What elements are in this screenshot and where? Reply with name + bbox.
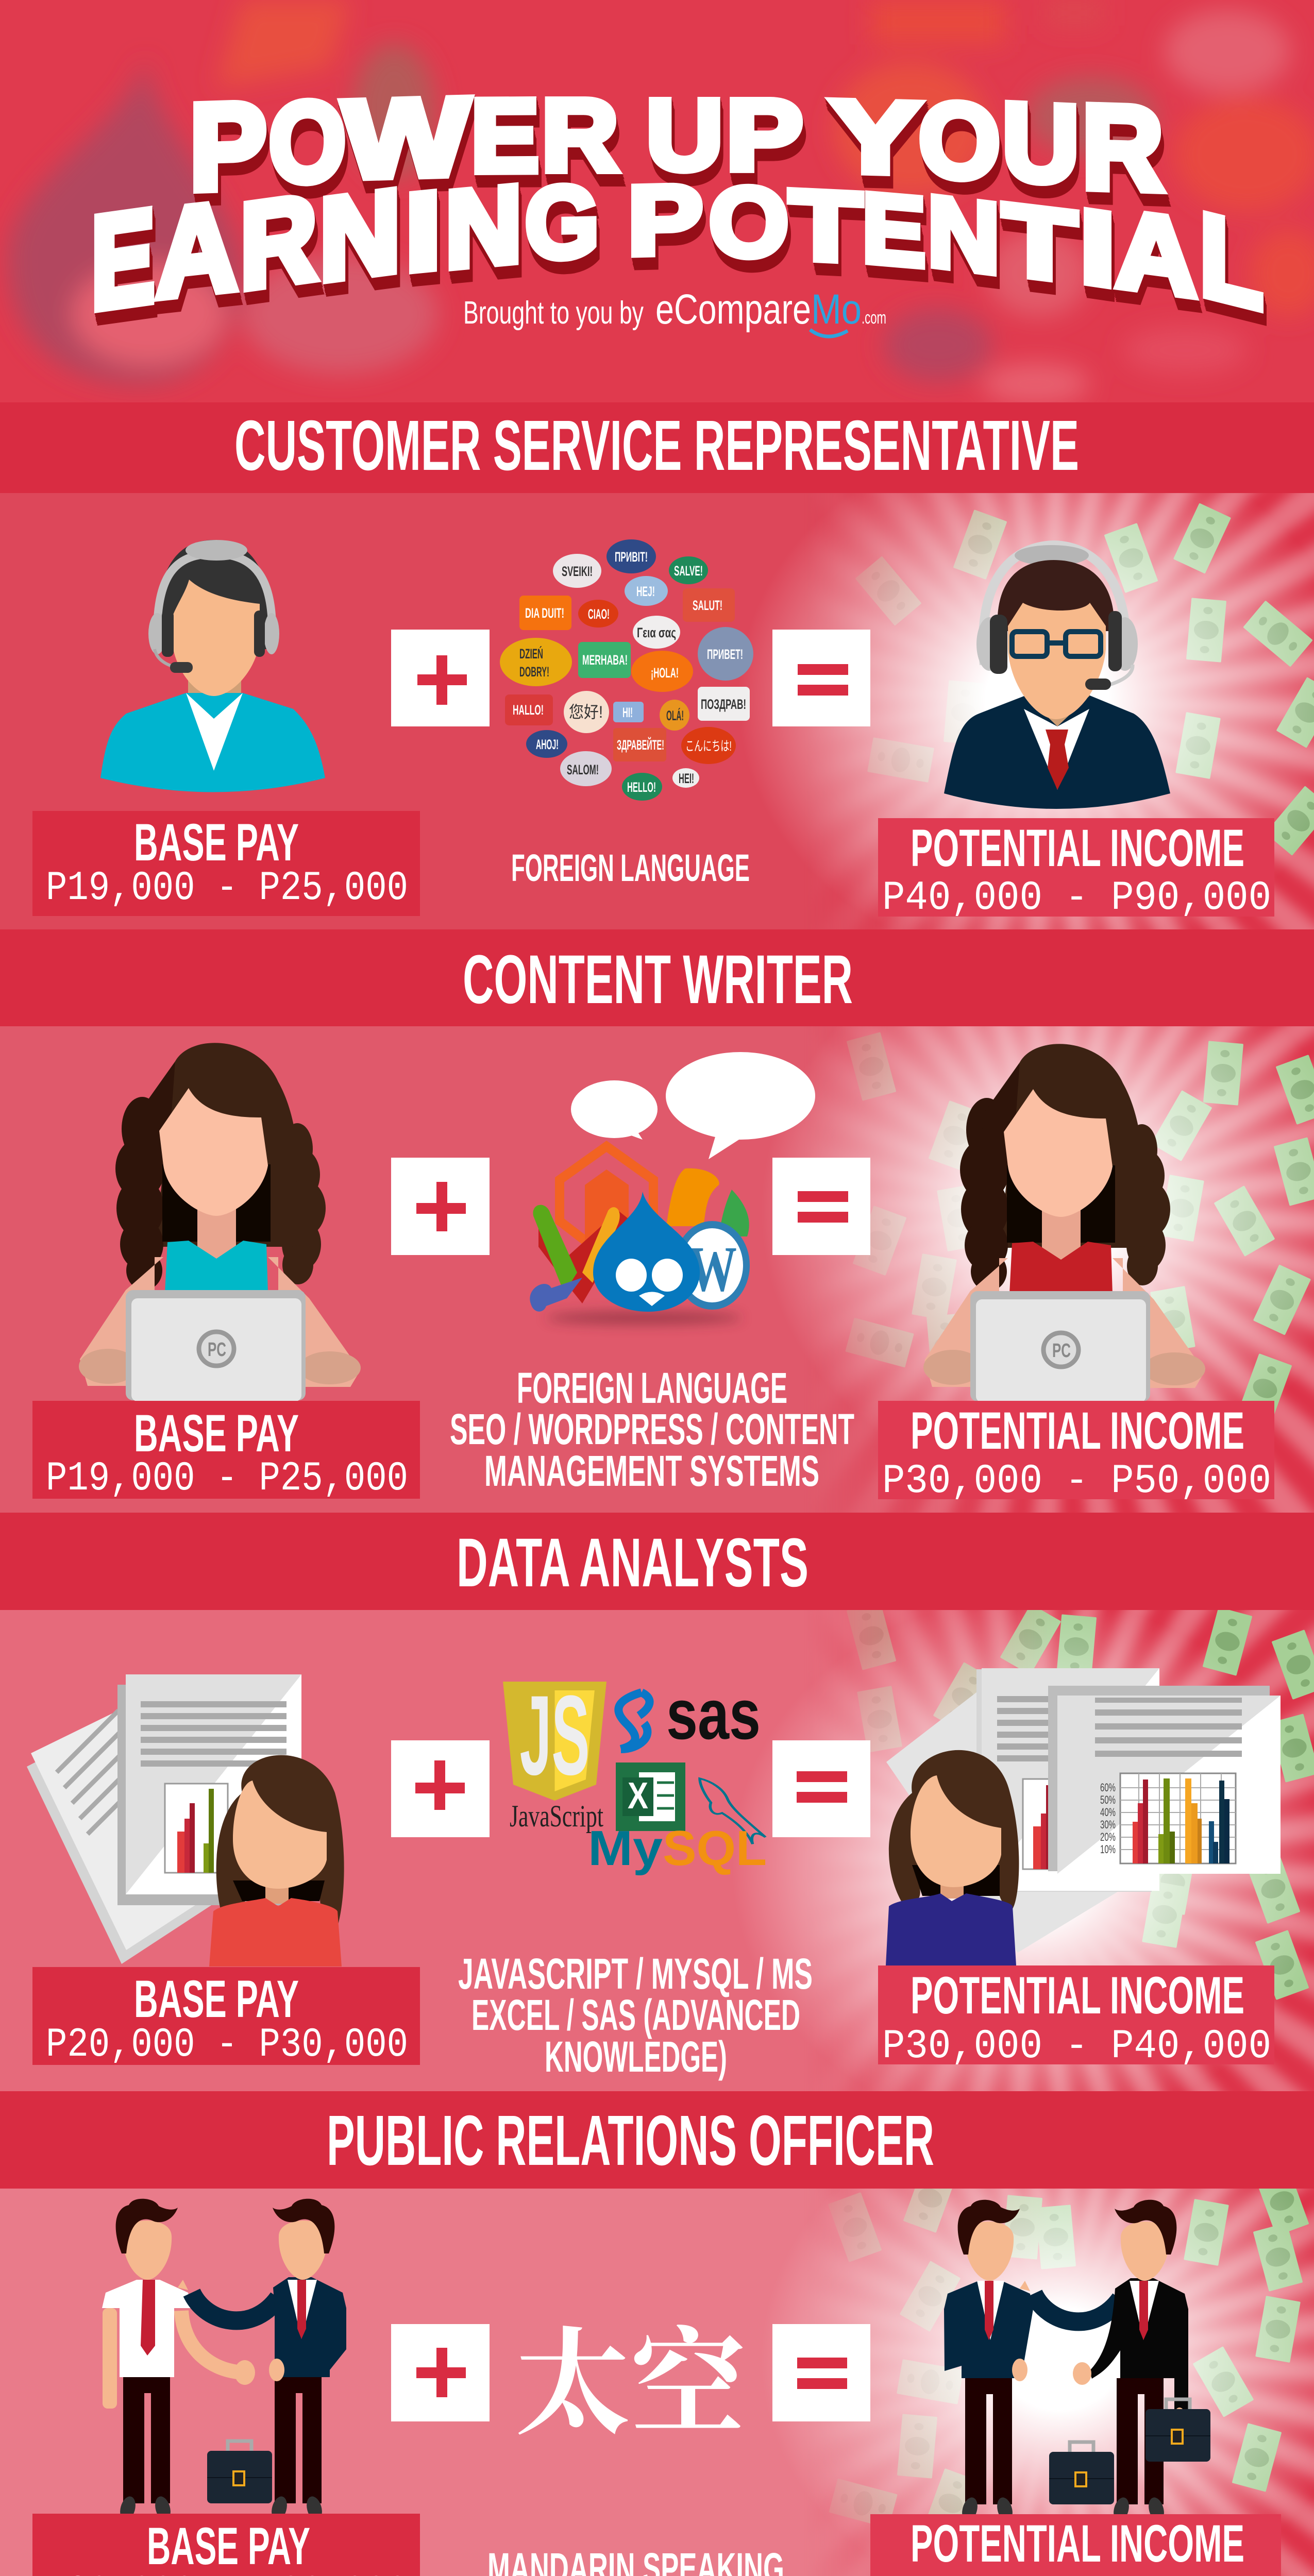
- figure: upgraded analyst with documents: [886, 1668, 1281, 1965]
- chart: income bar chart: 10%: [1100, 1843, 1116, 1856]
- title: O: [709, 167, 788, 278]
- title: W: [343, 75, 469, 201]
- label: potential income: P30,000 - P50,000: [882, 1458, 1271, 1505]
- icon: language speech bubbles: SALVE!: [674, 563, 703, 579]
- title: Y: [830, 79, 921, 195]
- heading bar: data analysts: [0, 1513, 1314, 1610]
- icon: language speech bubbles: ПРИВЕТ!: [707, 647, 743, 662]
- chart: income bar chart: 60%: [1100, 1781, 1116, 1794]
- title: R: [1082, 80, 1163, 215]
- brought to you by logo (top): [463, 286, 886, 336]
- figure: base writer: [79, 1043, 361, 1401]
- icon: language speech bubbles: SALUT!: [693, 598, 722, 613]
- icon: language speech bubbles: DOBRY!: [519, 664, 549, 680]
- figure: base officers shaking hands: [102, 2199, 346, 2522]
- brought to you by logo (top): eCompare: [655, 286, 811, 333]
- icon: language speech bubbles: SVEIKI!: [562, 564, 593, 579]
- title: U: [646, 78, 723, 191]
- title: I: [1080, 187, 1116, 309]
- panel: data analysts: [0, 1610, 1314, 2091]
- heading bar: content writer: [0, 929, 1314, 1026]
- background: blurred hero header: [0, 0, 1314, 404]
- title: R: [240, 170, 317, 315]
- figure: upgraded writer: [923, 1044, 1205, 1402]
- panel: customer service representative: [0, 493, 1314, 929]
- title: G: [525, 164, 599, 280]
- icon: analytics tool logos: sas: [666, 1675, 761, 1754]
- icon: language speech bubbles: AHOJ!: [536, 737, 559, 752]
- operator plus: [391, 630, 490, 726]
- panel: english tutor: [0, 2317, 1314, 2576]
- operator equals: [772, 1740, 870, 1837]
- text: required skills: EXCEL / SAS (ADVANCED: [471, 1991, 800, 2039]
- title: A: [1116, 187, 1197, 320]
- icon: CMS logos and speech bubbles: [530, 1052, 815, 1325]
- figure: upgraded officers shaking hands: [944, 2200, 1210, 2523]
- title: N: [445, 162, 522, 292]
- icon: language speech bubbles: [500, 539, 753, 801]
- figure: base agent: [100, 540, 325, 792]
- figure: base analyst with documents: [27, 1674, 344, 1967]
- sunburst and money background: [746, 1610, 1314, 2091]
- title: O: [269, 77, 346, 207]
- figure: upgraded agent: [944, 545, 1170, 809]
- label: potential income: P30,000 - P40,000: [882, 2023, 1271, 2070]
- heading bar: public relations officer: [0, 2091, 1314, 2189]
- operator equals: [772, 630, 870, 726]
- heading bar: content writer: CONTENT WRITER: [463, 941, 853, 1018]
- text: required skills: KNOWLEDGE): [545, 2032, 727, 2081]
- icon: language speech bubbles: Γεια σας: [637, 625, 676, 640]
- label: base pay: P19,000 - P25,000: [46, 1455, 408, 1502]
- label: base pay: BASE PAY: [147, 2517, 310, 2575]
- title: N: [319, 165, 400, 306]
- icon: language speech bubbles: HALLO!: [513, 702, 544, 718]
- text: required skills: FOREIGN LANGUAGE: [517, 1364, 787, 1412]
- label: base pay: [32, 1401, 420, 1502]
- icon: analytics tool logos: [503, 1671, 767, 1876]
- icon: language speech bubbles: HELLO!: [627, 779, 656, 795]
- title: O: [919, 79, 1000, 202]
- label: potential income: [878, 1965, 1274, 2070]
- icon: language speech bubbles: ПОЗДРАВ!: [701, 697, 746, 712]
- figure: upgraded writer: PC: [1052, 1340, 1071, 1362]
- icon: language speech bubbles: HEJ!: [636, 584, 655, 599]
- text: mandarin characters: 太空: [515, 2290, 746, 2458]
- title: E: [471, 78, 539, 194]
- label: base pay: [32, 1967, 420, 2069]
- chart: income bar chart: [1100, 1773, 1236, 1863]
- text: required skills: SEO / WORDPRESS / CONTENT: [450, 1405, 854, 1453]
- title: E: [862, 172, 925, 287]
- sunburst and money background: [491, 2317, 1314, 2576]
- title: T: [789, 169, 862, 282]
- label: base pay: BASE PAY: [134, 1404, 299, 1463]
- title: P: [628, 165, 703, 276]
- text: required skill: FOREIGN LANGUAGE: [511, 846, 750, 889]
- icon: language speech bubbles: ПРИВІТ!: [615, 549, 648, 565]
- icon: language speech bubbles: MERHABA!: [582, 652, 628, 668]
- icon: language speech bubbles: ¡HOLA!: [651, 665, 679, 681]
- text: required skills: [458, 1950, 813, 2081]
- icon: language speech bubbles: SALOM!: [567, 762, 599, 777]
- heading bar: data analysts: DATA ANALYSTS: [457, 1524, 808, 1601]
- icon: analytics tool logos: My: [588, 1821, 663, 1876]
- icon: analytics tool logos: X: [628, 1775, 648, 1817]
- icon: language speech bubbles: DZIEŃ: [519, 646, 543, 662]
- figure: base writer: PC: [208, 1339, 226, 1361]
- sunburst and money background: [442, 1740, 1314, 2576]
- icon: language speech bubbles: こんにちは!: [685, 738, 732, 754]
- text: required skills: MANAGEMENT SYSTEMS: [484, 1447, 819, 1495]
- label: potential income: [878, 1401, 1274, 1505]
- title: U: [1002, 80, 1079, 207]
- chart: income bar chart: 30%: [1100, 1818, 1116, 1831]
- icon: analytics tool logos: JavaScript: [510, 1799, 603, 1833]
- brought to you by logo (top): Brought to you by: [463, 295, 644, 331]
- text: required skills: [450, 1364, 854, 1495]
- label: potential income: [878, 818, 1274, 922]
- icon: language speech bubbles: HI!: [622, 705, 633, 720]
- label: base pay: [32, 811, 420, 916]
- chart: income bar chart: 40%: [1100, 1806, 1116, 1819]
- label: base pay: P20,000 - P30,000: [46, 2022, 408, 2069]
- label: base pay: P19,000 - P25,000: [46, 865, 408, 912]
- label: potential income: P40,000 - P90,000: [882, 875, 1271, 922]
- brought to you by logo (top): Mo: [811, 286, 862, 333]
- panel: public relations officer: [0, 1740, 1314, 2576]
- operator plus: [391, 1740, 490, 1837]
- operator equals: [772, 1158, 870, 1255]
- sunburst and money background: [778, 1026, 1314, 1513]
- icon: language speech bubbles: CIAO!: [588, 606, 610, 622]
- operator plus: [391, 2324, 490, 2421]
- panel: content writer: [0, 1026, 1314, 1513]
- title: A: [156, 175, 237, 324]
- title: [91, 75, 1263, 337]
- label: base pay: BASE PAY: [134, 813, 299, 872]
- brought to you by logo (top): .com: [862, 308, 886, 328]
- icon: language speech bubbles: 您好!: [569, 703, 603, 721]
- icon: analytics tool logos: JS: [520, 1671, 589, 1799]
- title: I: [405, 168, 441, 295]
- icon: language speech bubbles: DIA DUIT!: [525, 605, 564, 621]
- icon: language speech bubbles: OLÁ!: [666, 707, 684, 723]
- operator plus: [391, 1158, 490, 1255]
- icon: language speech bubbles: ЗДРАВЕЙТЕ!: [617, 737, 664, 753]
- title: P: [726, 79, 803, 191]
- icon: language speech bubbles: HEI!: [679, 771, 694, 786]
- chart: income bar chart: 20%: [1100, 1831, 1116, 1843]
- title: T: [1003, 182, 1077, 303]
- title: E: [91, 182, 155, 337]
- title: N: [928, 175, 1000, 295]
- title: P: [190, 76, 266, 215]
- label: base pay: BASE PAY: [134, 1970, 299, 2028]
- sunburst and money background: [750, 493, 1314, 929]
- text: required skills: JAVASCRIPT / MYSQL / MS: [458, 1950, 813, 1998]
- label: base pay: [32, 2514, 420, 2576]
- icon: CMS logos and speech bubbles: W: [688, 1234, 737, 1305]
- operator equals: [772, 2324, 870, 2421]
- chart: income bar chart: 50%: [1100, 1793, 1116, 1806]
- icon: analytics tool logos: SQL: [663, 1821, 767, 1876]
- title: L: [1200, 189, 1263, 335]
- title: R: [542, 77, 618, 192]
